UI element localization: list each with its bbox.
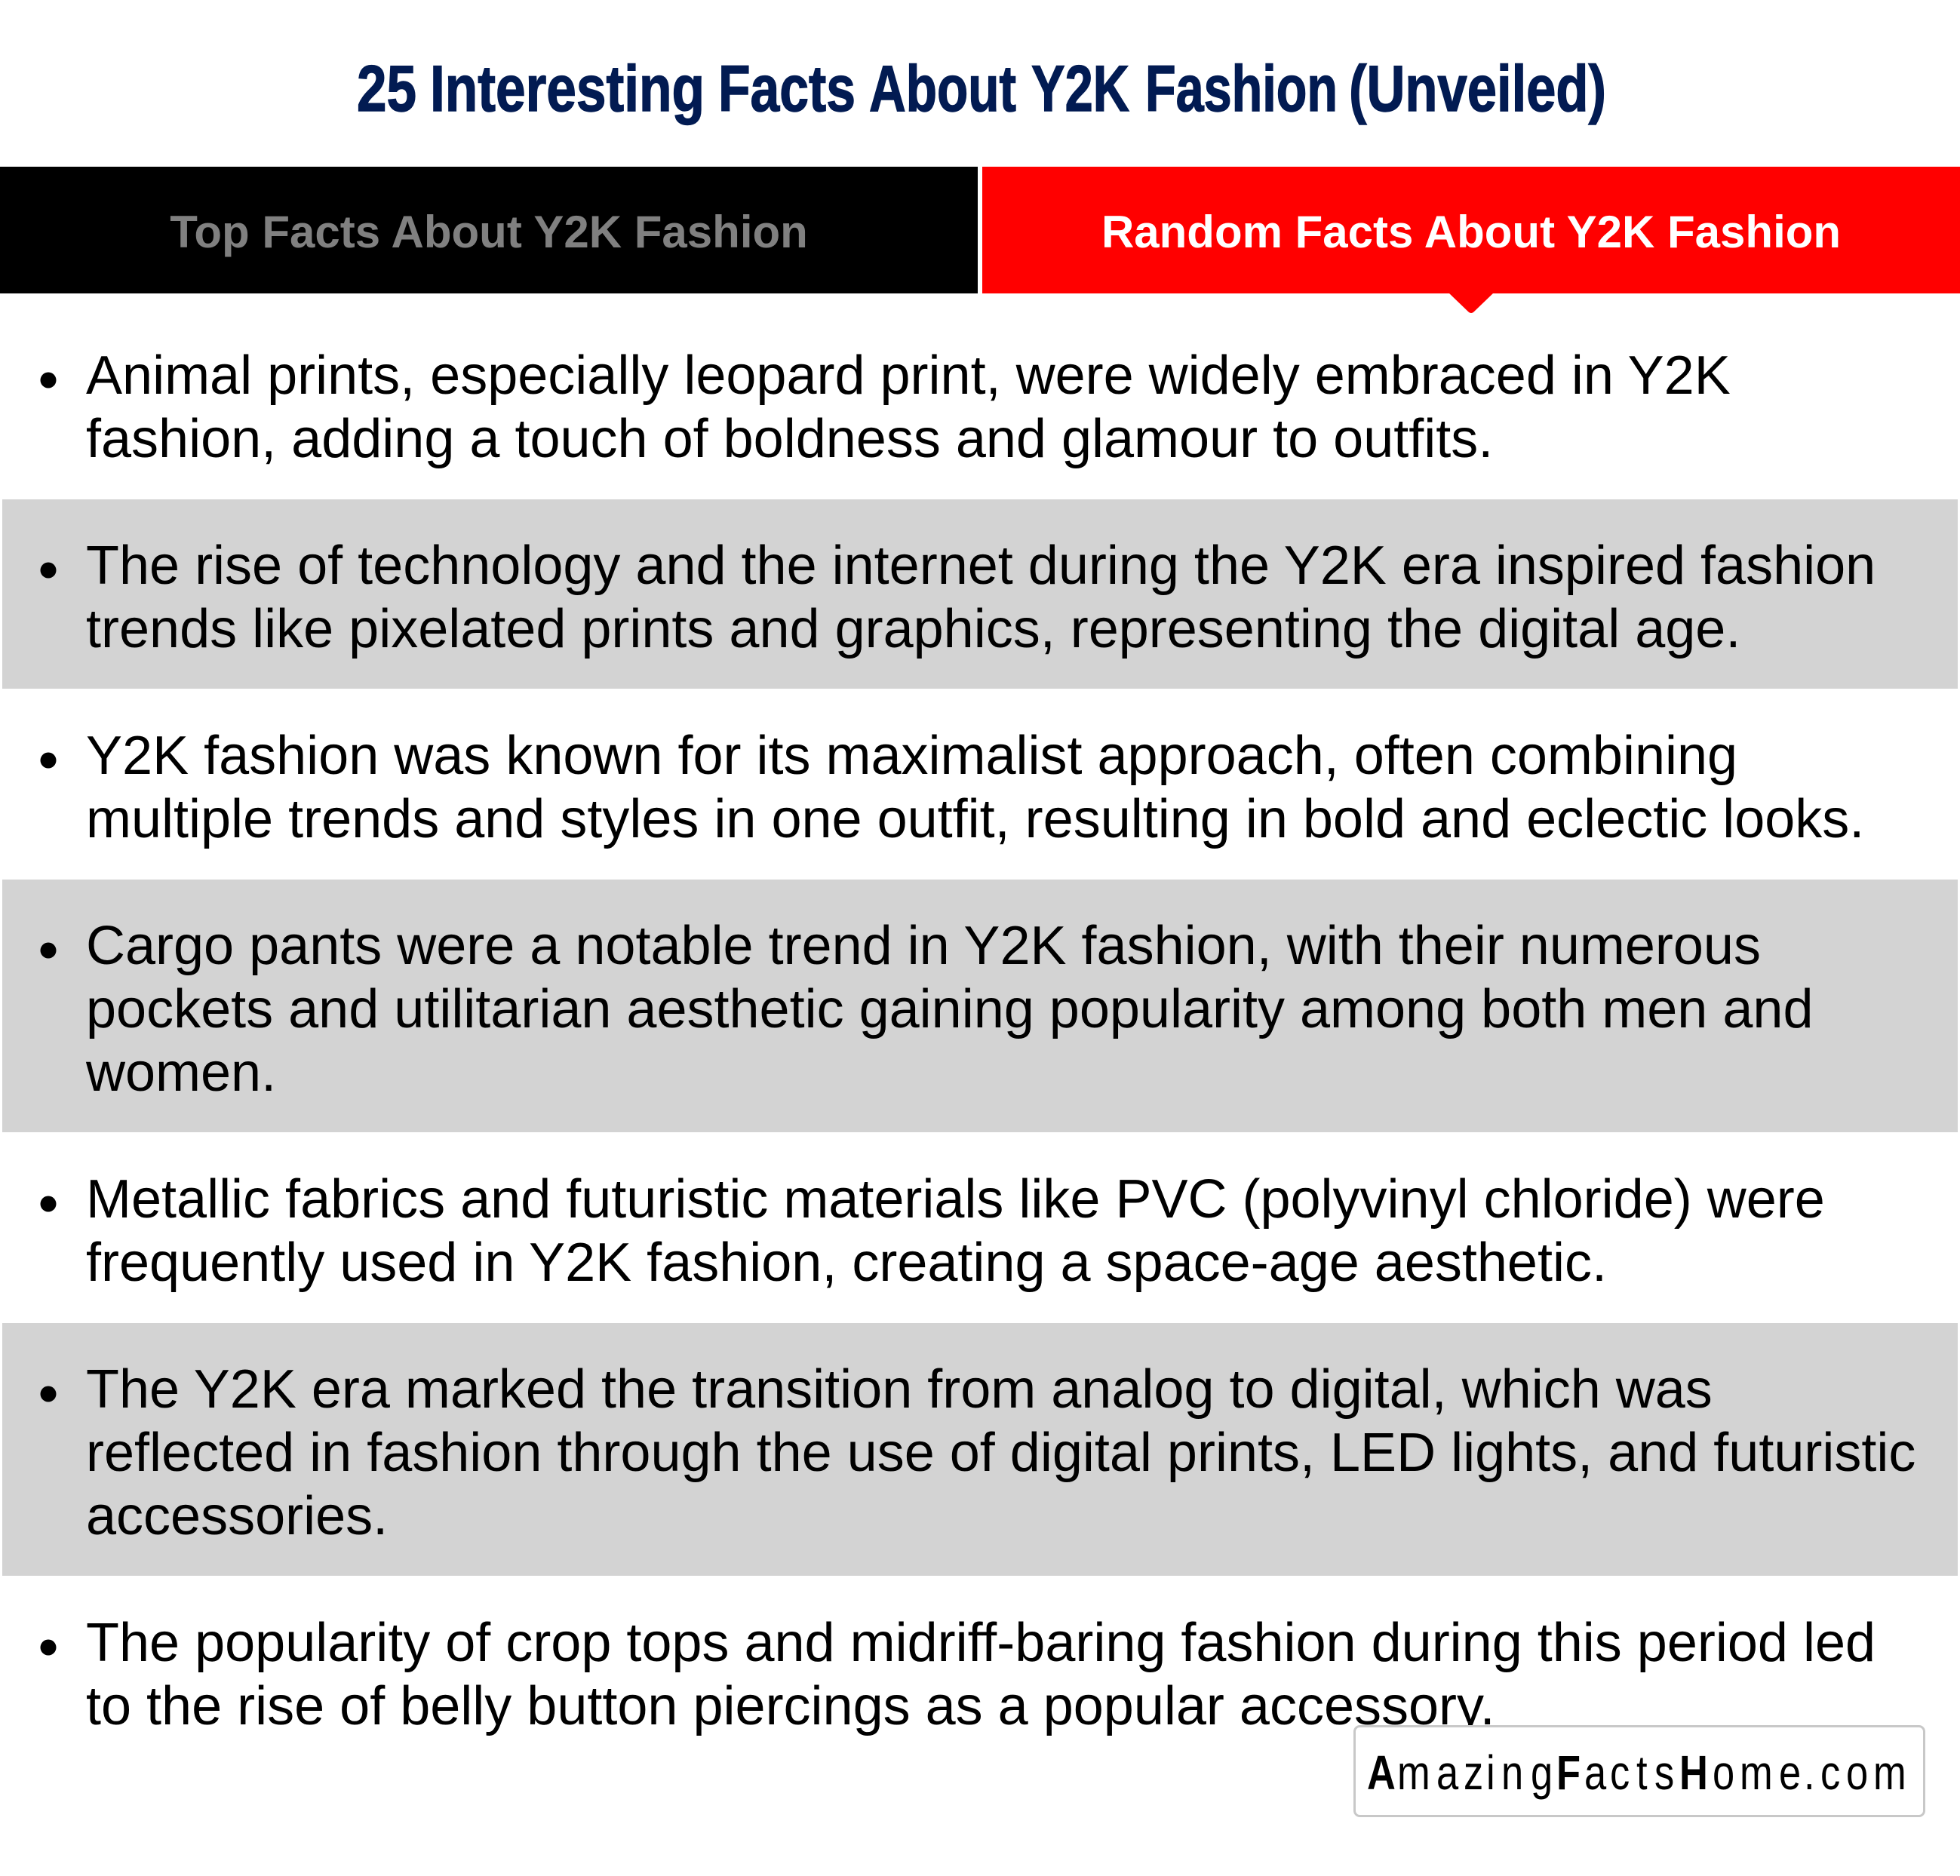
fact 4: pockets and utilitarian aesthetic gaining popularity among both men and [86, 979, 1813, 1039]
fact 7: to the rise of belly button piercings as a popular accessory. [86, 1676, 1495, 1736]
watermark: AmazingFactsHome.com [1367, 1746, 1906, 1800]
fact 1 [41, 345, 1731, 469]
tab: top facts [0, 167, 978, 293]
title [357, 53, 1606, 125]
tab: top facts: Top Facts About Y2K Fashion [170, 207, 808, 257]
fact 7: The popularity of crop tops and midriff-baring fashion during this period led [86, 1613, 1876, 1673]
fact 2: trends like pixelated prints and graphics, representing the digital age. [86, 599, 1740, 659]
fact 3: multiple trends and styles in one outfit, resulting in bold and eclectic looks. [86, 789, 1864, 849]
fact 6: accessories. [86, 1486, 388, 1546]
fact 7 [41, 1613, 1876, 1736]
tab: random facts (active): Random Facts About Y2K Fashion [1101, 207, 1841, 257]
title: Y2K [1031, 53, 1129, 125]
title: 25 [357, 53, 416, 125]
fact 6 [2, 1323, 1958, 1576]
tab: random facts (active) [982, 167, 1960, 313]
fact 6: reflected in fashion through the use of digital prints, LED lights, and futuristic [86, 1423, 1915, 1483]
fact 4: women. [85, 1042, 276, 1103]
fact 5 [41, 1169, 1825, 1293]
title: Facts [718, 53, 856, 125]
fact 5: Metallic fabrics and futuristic materials like PVC (polyvinyl chloride) were [86, 1169, 1825, 1230]
title: About [869, 53, 1016, 125]
title: Fashion [1145, 53, 1338, 125]
fact 2: The rise of technology and the internet during the Y2K era inspired fashion [86, 536, 1876, 596]
fact 2 [2, 499, 1958, 689]
fact 3 [41, 726, 1864, 849]
fact 6: The Y2K era marked the transition from analog to digital, which was [86, 1359, 1713, 1420]
fact 4 [2, 880, 1958, 1132]
title: Interesting [430, 53, 705, 125]
fact 4: Cargo pants were a notable trend in Y2K fashion, with their numerous [86, 916, 1761, 976]
fact 3: Y2K fashion was known for its maximalist approach, often combining [86, 726, 1737, 786]
title: (Unveiled) [1349, 53, 1606, 125]
fact 1: fashion, adding a touch of boldness and glamour to outfits. [86, 409, 1493, 469]
fact 5: frequently used in Y2K fashion, creating a space-age aesthetic. [86, 1233, 1607, 1293]
fact 1: Animal prints, especially leopard print, were widely embraced in Y2K [86, 345, 1731, 406]
watermark [1355, 1726, 1924, 1816]
